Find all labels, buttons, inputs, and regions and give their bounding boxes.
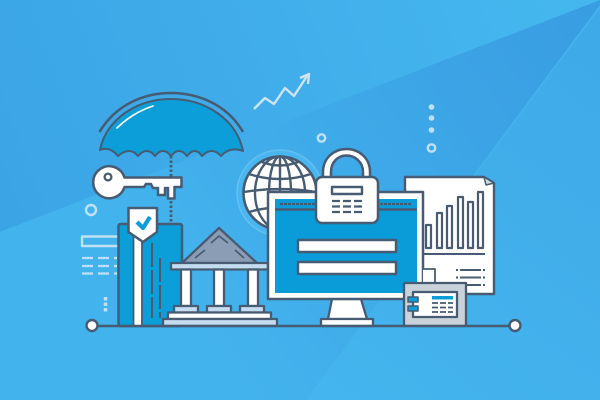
key <box>93 166 182 198</box>
umbrella highlight <box>117 106 153 128</box>
shield with check <box>128 208 157 242</box>
umbrella canopy <box>100 99 243 156</box>
trend arrow <box>254 74 309 109</box>
left decorative form lines <box>82 236 118 313</box>
tall building <box>118 224 182 326</box>
small card device <box>404 269 466 326</box>
globe <box>237 150 323 236</box>
decorative dots right <box>428 104 435 152</box>
ground line <box>86 320 520 331</box>
umbrella top arc <box>100 93 243 132</box>
umbrella pole <box>170 156 172 224</box>
login field two <box>298 262 396 274</box>
login field one <box>298 240 396 252</box>
monitor <box>268 192 423 326</box>
document with bar chart <box>405 177 494 294</box>
decorative ring left <box>86 205 96 215</box>
decorative ring <box>318 134 325 142</box>
umbrella <box>100 93 243 224</box>
padlock <box>316 149 378 223</box>
bank <box>163 228 277 326</box>
